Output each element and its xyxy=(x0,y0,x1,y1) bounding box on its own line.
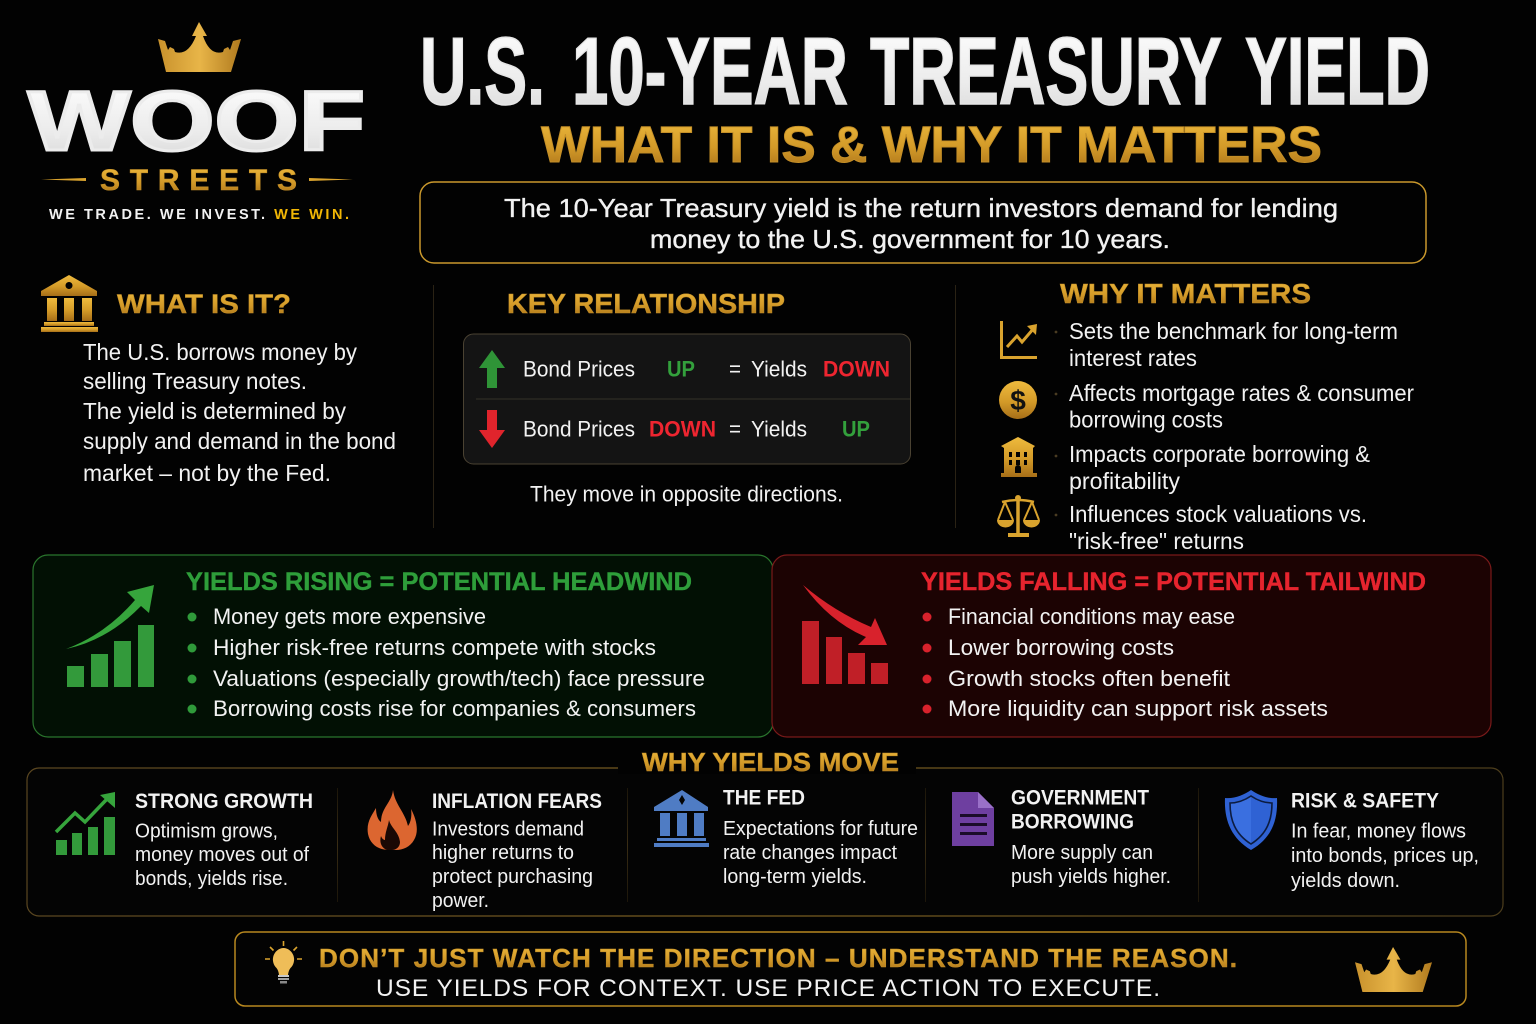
item: government borrowing xyxy=(952,786,1171,888)
list: yields rising: Borrowing costs rise for companies & consumers xyxy=(213,696,696,721)
heading: yields rising: YIELDS RISING = POTENTIAL HEADWIND xyxy=(186,568,692,596)
logo subtitle: STREETS xyxy=(100,164,297,197)
icon: corporate building xyxy=(1001,437,1037,477)
callout: takeaway xyxy=(235,932,1466,1006)
item: government borrowing: BORROWING xyxy=(1011,810,1134,834)
logo: Woof Streets xyxy=(28,22,365,223)
heading: why it matters: WHY IT MATTERS xyxy=(1060,278,1311,309)
icon: gold bank xyxy=(41,275,98,332)
list: yields falling xyxy=(922,604,1328,721)
takeaway subline: USE YIELDS FOR CONTEXT. USE PRICE ACTION TO EXECUTE. xyxy=(376,975,1160,1002)
title: U.S. xyxy=(420,18,545,125)
body: what is it: market – not by the Fed. xyxy=(83,460,331,486)
relationship table: UP xyxy=(842,416,870,442)
title xyxy=(420,18,1430,125)
definition callout xyxy=(420,182,1426,263)
item: the fed: long-term yields. xyxy=(723,866,867,888)
icon: footer crown xyxy=(1355,947,1432,992)
list: why it matters xyxy=(1055,318,1414,554)
list: yields rising xyxy=(188,604,705,721)
item: risk and safety: into bonds, prices up, xyxy=(1291,845,1479,867)
definition callout: money to the U.S. government for 10 years. xyxy=(650,224,1170,254)
icon: red down arrow xyxy=(479,410,505,448)
relationship table: = xyxy=(729,416,741,442)
icon: rising bars and arrow xyxy=(66,585,154,687)
item: risk and safety xyxy=(1225,790,1479,892)
item: government borrowing: push yields higher. xyxy=(1011,866,1171,888)
relationship table: Yields xyxy=(751,356,807,382)
list: why it matters: Impacts corporate borrowing & xyxy=(1069,441,1370,467)
icon: green up arrow xyxy=(479,350,505,388)
item: the fed: THE FED xyxy=(723,786,805,810)
heading: key relationship: KEY RELATIONSHIP xyxy=(507,288,785,319)
item: government borrowing: More supply can xyxy=(1011,842,1153,864)
icon: flame xyxy=(368,790,417,850)
body: what is it xyxy=(83,339,396,486)
title: YIELD xyxy=(1245,18,1430,125)
item: risk and safety: RISK & SAFETY xyxy=(1291,790,1439,812)
relationship table: DOWN xyxy=(649,416,716,442)
heading: yields falling: YIELDS FALLING = POTENTIAL TAILWIND xyxy=(921,568,1426,596)
list: yields rising: Higher risk-free returns compete with stocks xyxy=(213,635,656,660)
list: why it matters: "risk-free" returns xyxy=(1069,528,1244,554)
definition callout: The 10-Year Treasury yield is the return investors demand for lending xyxy=(504,193,1338,223)
panel: yields rising xyxy=(33,555,773,737)
relationship table: = xyxy=(729,356,741,382)
logo rule left xyxy=(41,178,86,181)
list: yields rising: Money gets more expensive xyxy=(213,604,486,629)
icon: logo crown xyxy=(158,22,241,72)
item: inflation fears: Investors demand xyxy=(432,818,584,840)
panel: key relationship xyxy=(464,288,910,506)
panel: yields falling xyxy=(772,555,1491,737)
icon: line chart xyxy=(1002,321,1037,358)
takeaway headline: DON’T JUST WATCH THE DIRECTION – UNDERSTAND THE REASON. xyxy=(319,943,1237,973)
list: yields falling: Lower borrowing costs xyxy=(948,635,1174,660)
icon: shield xyxy=(1225,790,1277,850)
icon: falling bars and arrow xyxy=(802,585,888,684)
list: why it matters: Influences stock valuations vs. xyxy=(1069,501,1367,527)
list: why it matters: interest rates xyxy=(1069,345,1197,371)
icon: blue bank xyxy=(654,790,709,847)
relationship table: Yields xyxy=(751,416,807,442)
item: strong growth xyxy=(56,790,313,890)
list: yields rising: Valuations (especially growth/tech) face pressure xyxy=(213,666,705,691)
list: why it matters: borrowing costs xyxy=(1069,406,1223,432)
item: the fed: Expectations for future xyxy=(723,818,918,840)
body: what is it: The U.S. borrows money by xyxy=(83,339,357,365)
title: TREASURY xyxy=(870,18,1222,125)
item: inflation fears: higher returns to xyxy=(432,842,574,864)
relationship table: UP xyxy=(667,356,695,382)
logo tagline: WE TRADE. WE INVEST. WE WIN. xyxy=(49,207,349,223)
icon: dollar coin xyxy=(999,381,1037,419)
panel: why it matters xyxy=(997,278,1414,554)
relationship table: Bond Prices xyxy=(523,356,635,382)
item: the fed: rate changes impact xyxy=(723,842,897,864)
list: yields falling: Growth stocks often benefit xyxy=(948,666,1231,691)
list: yields falling: More liquidity can support risk assets xyxy=(948,696,1328,721)
heading: why yields move: WHY YIELDS MOVE xyxy=(642,747,899,777)
relationship table xyxy=(464,334,910,464)
item: inflation fears: power. xyxy=(432,890,489,912)
item: strong growth: money moves out of xyxy=(135,844,309,866)
title: 10-YEAR xyxy=(572,18,848,125)
relationship table: Bond Prices xyxy=(523,416,635,442)
subtitle: WHAT IT IS & WHY IT MATTERS xyxy=(541,116,1322,173)
icon: growth chart xyxy=(56,792,115,855)
item: risk and safety: In fear, money flows xyxy=(1291,820,1466,842)
panel: what is it xyxy=(41,275,396,486)
list: yields falling: Financial conditions may ease xyxy=(948,604,1235,629)
item: strong growth: bonds, yields rise. xyxy=(135,868,288,890)
note: opposite directions: They move in opposite directions. xyxy=(530,482,843,506)
list: why it matters: Affects mortgage rates & consumer xyxy=(1069,380,1414,406)
body: what is it: supply and demand in the bond xyxy=(83,428,396,454)
logo rule right xyxy=(309,178,353,181)
item: inflation fears: INFLATION FEARS xyxy=(432,790,602,813)
icon: light bulb xyxy=(265,941,302,984)
icon: dollar coin: $ xyxy=(1010,385,1026,416)
item: inflation fears xyxy=(368,790,602,912)
heading: what is it: WHAT IS IT? xyxy=(117,289,291,319)
body: what is it: The yield is determined by xyxy=(83,398,346,424)
item: strong growth: STRONG GROWTH xyxy=(135,790,313,813)
panel: why yields move xyxy=(27,747,1503,916)
icon: scales xyxy=(997,495,1040,535)
item: government borrowing: GOVERNMENT xyxy=(1011,786,1149,810)
relationship table: DOWN xyxy=(823,356,890,382)
list: why it matters: profitability xyxy=(1069,468,1181,494)
body: what is it: selling Treasury notes. xyxy=(83,368,307,394)
item: inflation fears: protect purchasing xyxy=(432,866,593,888)
item: the fed xyxy=(654,786,918,888)
item: risk and safety: yields down. xyxy=(1291,870,1400,892)
list: why it matters: Sets the benchmark for long-term xyxy=(1069,318,1398,344)
icon: document xyxy=(952,792,994,846)
logo wordmark: WOOF xyxy=(28,74,365,168)
item: strong growth: Optimism grows, xyxy=(135,820,278,842)
